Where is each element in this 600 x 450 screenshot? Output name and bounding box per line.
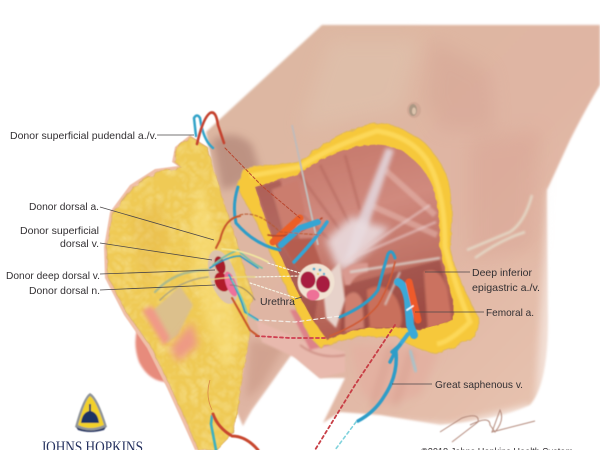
scrotal and penile tissue xyxy=(256,310,345,378)
signature xyxy=(440,410,535,442)
urethra cross section xyxy=(298,264,334,300)
body skin xyxy=(206,25,600,450)
labels: Donor dorsal a. xyxy=(29,201,99,213)
labels: epigastric a./v. xyxy=(472,282,540,294)
sternal band needle xyxy=(292,125,318,245)
exposed muscles xyxy=(255,148,453,332)
leader lines xyxy=(100,135,484,384)
labels: Donor dorsal n. xyxy=(29,285,100,297)
lower thigh muscles xyxy=(350,345,440,408)
navel xyxy=(407,102,421,118)
flap vessels xyxy=(155,112,268,450)
labels: Deep inferior xyxy=(472,267,532,279)
labels: Donor superficial xyxy=(20,225,99,237)
labels xyxy=(6,130,540,391)
recipient vessels left xyxy=(234,187,327,262)
yellow incision fat ring xyxy=(237,123,478,353)
recipient vessels right xyxy=(330,252,418,421)
labels: dorsal v. xyxy=(60,238,99,250)
labels: Donor deep dorsal v. xyxy=(6,270,100,282)
labels: Donor superficial pudendal a./v. xyxy=(10,130,157,142)
labels: Great saphenous v. xyxy=(435,379,523,391)
labels: Urethra xyxy=(260,296,295,308)
Johns Hopkins logo xyxy=(41,393,143,450)
labels: Femoral a. xyxy=(486,307,534,319)
dashed vessel tunnels xyxy=(225,148,395,450)
flap incision window xyxy=(202,246,244,308)
thigh vein branch xyxy=(410,350,416,372)
donor flap xyxy=(100,130,260,450)
logo shield xyxy=(75,393,107,432)
